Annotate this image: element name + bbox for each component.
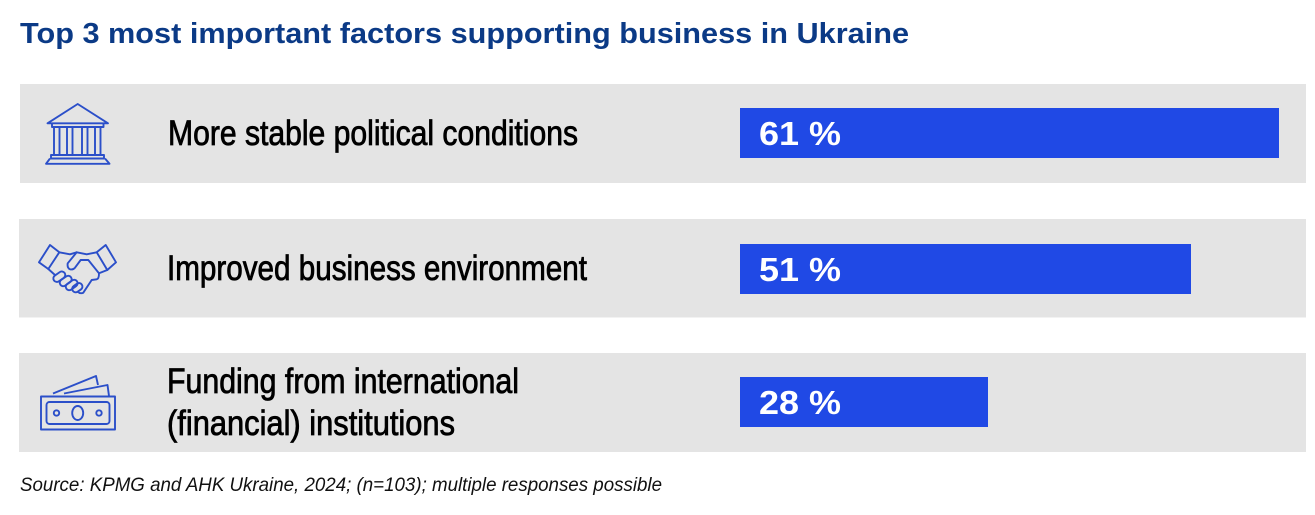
icon: government building <box>46 104 110 164</box>
bar: 28 %: 28 % <box>759 384 841 421</box>
panel: political conditions <box>20 84 1306 183</box>
label: Funding from international <box>167 362 519 401</box>
icon: banknotes <box>41 376 115 430</box>
panel: international funding: (financial) institutions <box>167 404 455 443</box>
label: Improved business environment <box>167 249 587 288</box>
bar: 61 %: 61 % <box>759 115 841 152</box>
bar: 28 % <box>740 377 988 427</box>
icon detail: fingers <box>52 270 84 294</box>
title: Top 3 most important factors supporting business in Ukraine <box>20 18 909 50</box>
icon: handshake <box>39 245 116 294</box>
panel: business environment <box>19 219 1306 318</box>
panel: international funding <box>19 353 1306 452</box>
bar: 61 % <box>740 108 1279 158</box>
source note: Source: KPMG and AHK Ukraine, 2024; (n=103); multiple responses possible <box>20 474 662 496</box>
label: More stable political conditions <box>168 114 578 153</box>
bar: 51 % <box>740 244 1191 294</box>
bar: 51 %: 51 % <box>759 251 841 288</box>
